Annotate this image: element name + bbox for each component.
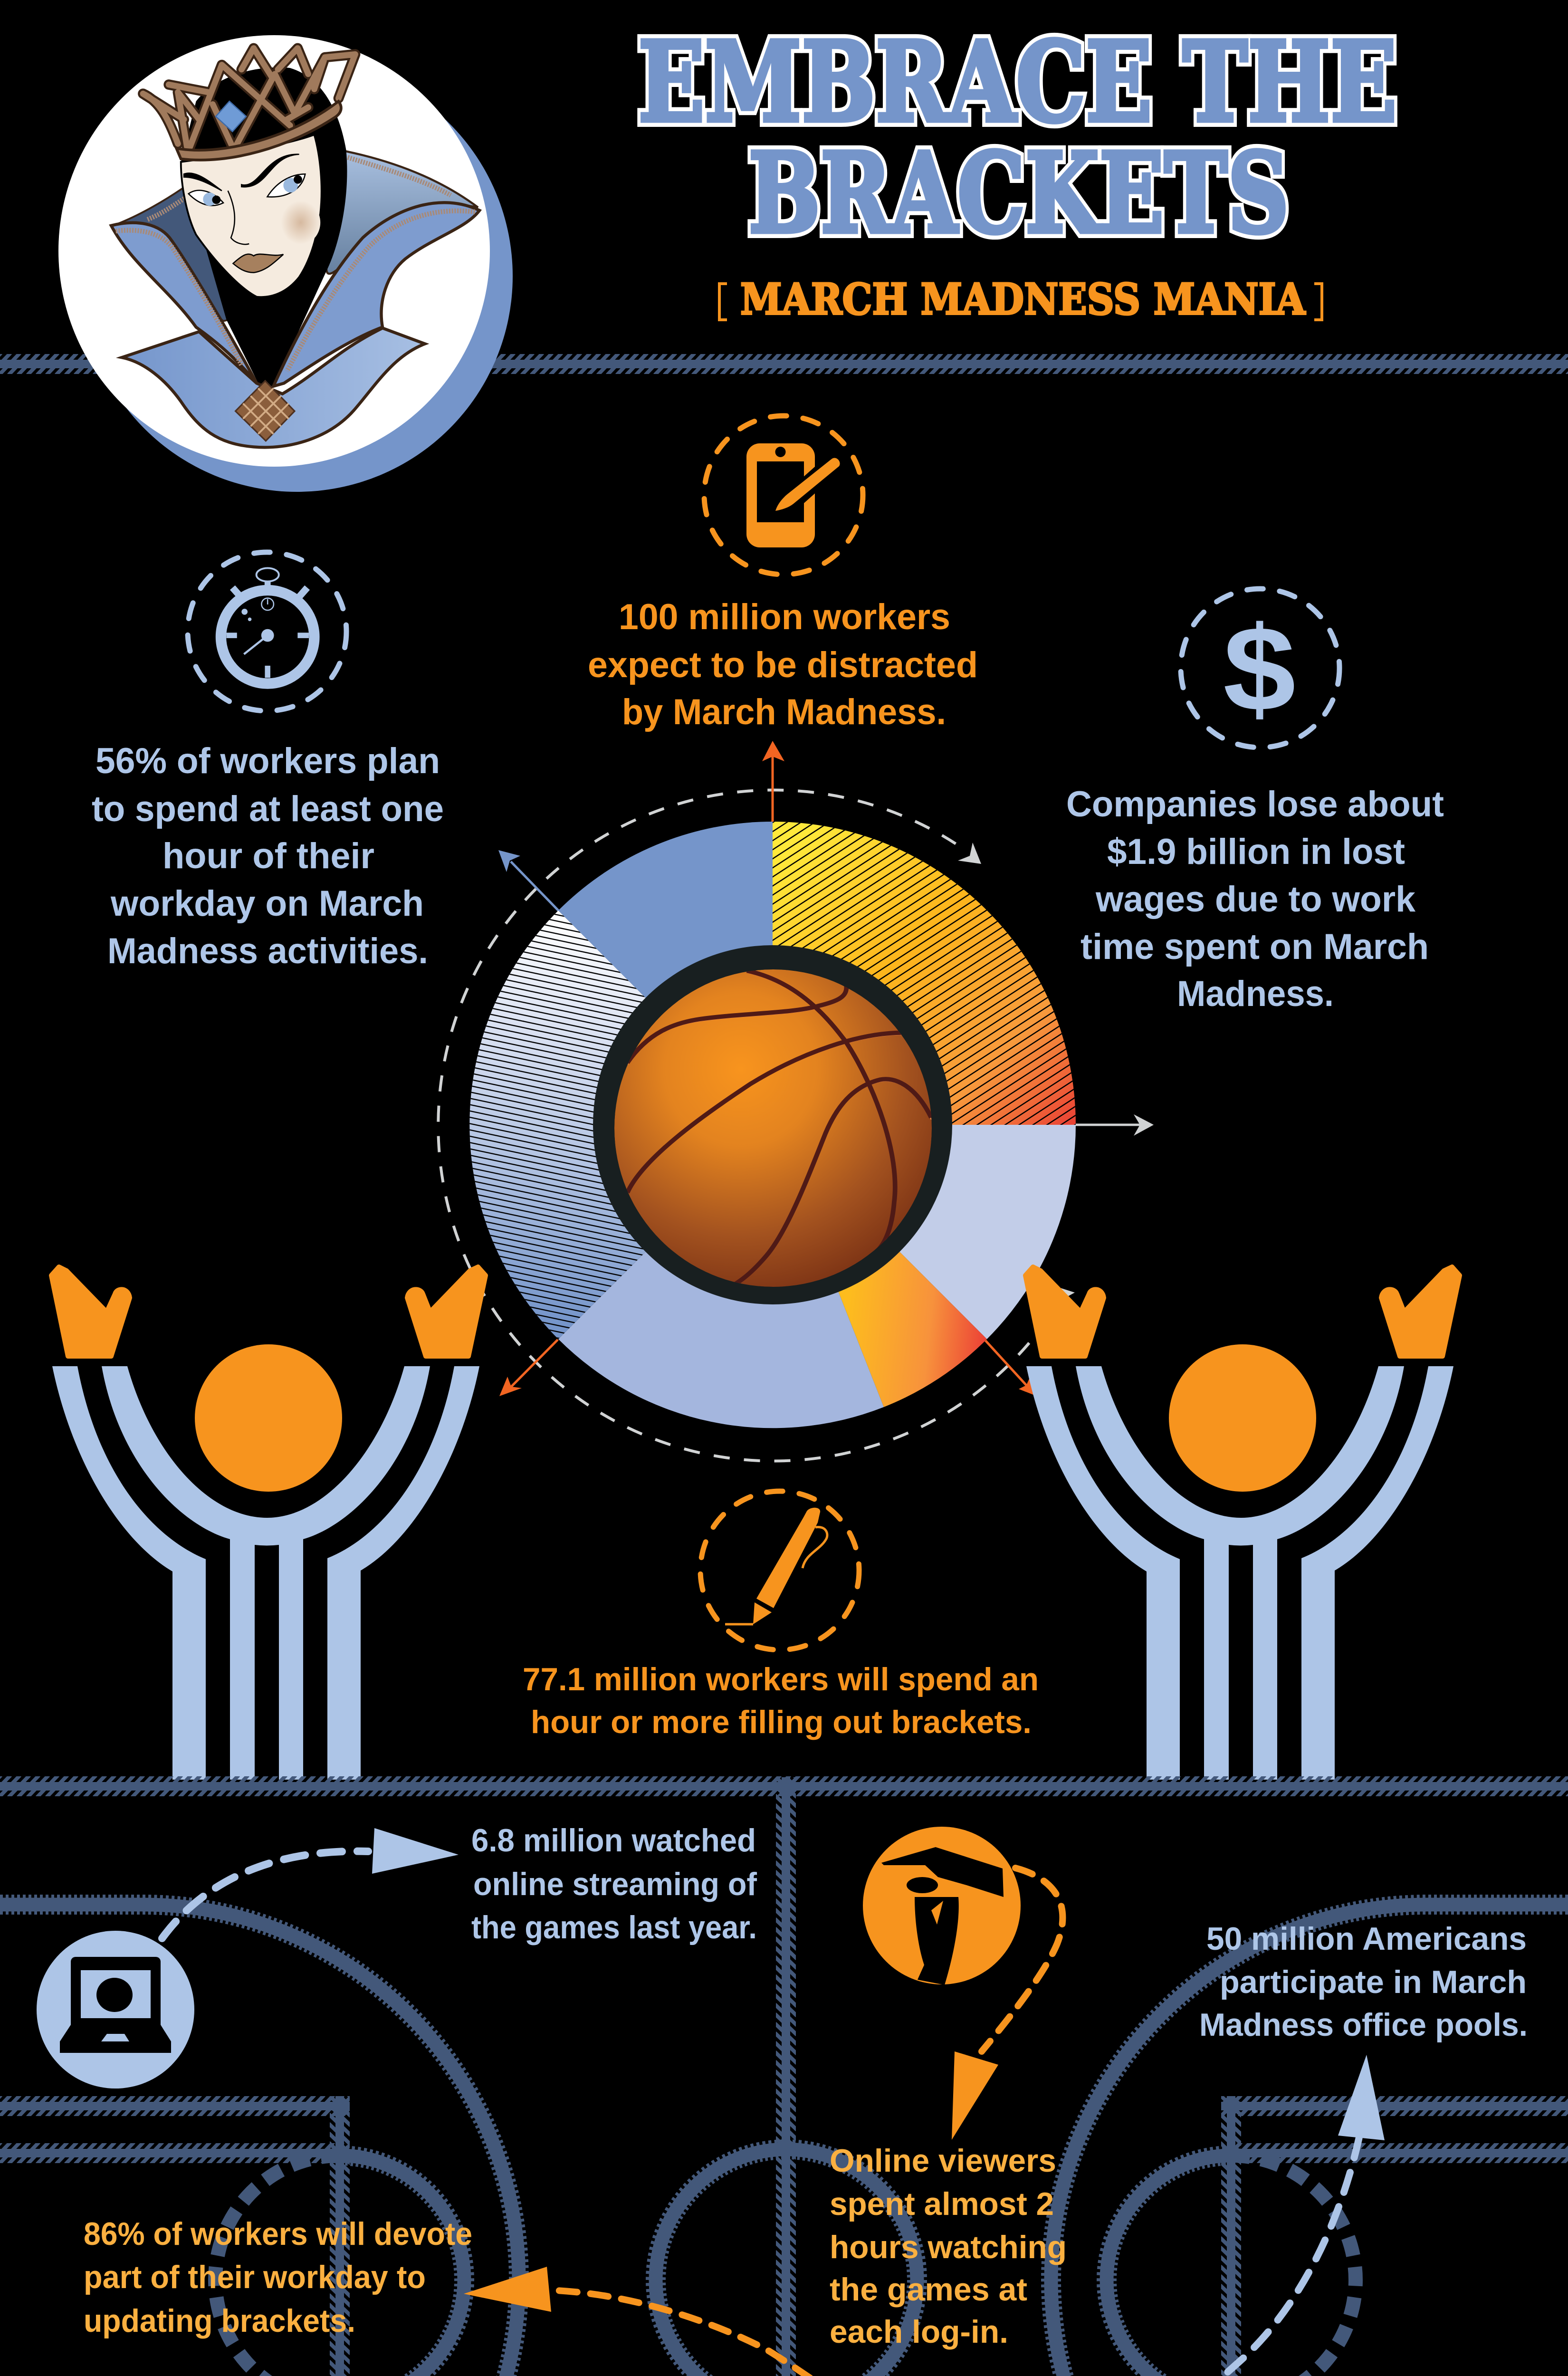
text: 86% of workers: part of their workday to xyxy=(84,2259,426,2295)
icon: stopwatch xyxy=(221,568,314,684)
text: 6.8 million watched: the games last year. xyxy=(471,1909,757,1945)
slice: periwinkle xyxy=(558,1125,884,1428)
text: 50 million Americans xyxy=(1199,1921,1528,2043)
text: 6.8 million watched xyxy=(471,1822,757,1945)
text: 86% of workers xyxy=(84,2216,472,2339)
text: companies lose: time spent on March xyxy=(1080,927,1429,967)
slice: pale blue xyxy=(773,1125,1076,1339)
text: 56% of workers: workday on March xyxy=(110,883,424,924)
text: online viewers: hours watching xyxy=(830,2229,1067,2265)
stat: lost wages xyxy=(1066,589,1444,1014)
text: 100 million workers: by March Madness. xyxy=(622,692,946,732)
text: companies lose: wages due to work xyxy=(1095,879,1416,920)
ring xyxy=(593,945,952,1304)
text: 77.1 million workers: 77.1 million workers will spend an xyxy=(523,1661,1039,1697)
text: 56% of workers: hour of their xyxy=(163,836,374,876)
icon: dollar sign: $ xyxy=(1223,601,1296,736)
queen emblem xyxy=(58,35,513,492)
text: online viewers: Online viewers xyxy=(830,2143,1056,2179)
text: companies lose: $1.9 billion in lost xyxy=(1107,832,1405,872)
text: 6.8 million watched: 6.8 million watched xyxy=(471,1822,756,1859)
cheering figure left xyxy=(51,1267,486,1780)
text: companies lose xyxy=(1066,784,1444,1014)
slice: blue xyxy=(558,822,773,1125)
hand stat xyxy=(830,1827,1067,2350)
text: 56% of workers: 56% of workers plan xyxy=(96,741,440,781)
text: 86% of workers: updating brackets. xyxy=(84,2303,355,2339)
pie chart with basketball xyxy=(438,741,1154,1461)
slice: hatched silver xyxy=(469,910,773,1339)
dashed orbit arrow xyxy=(438,790,1075,1461)
cheering figure right xyxy=(1025,1267,1460,1780)
stat: stopwatch xyxy=(92,552,444,971)
text: 50 million Americans: participate in March xyxy=(1220,1964,1527,2000)
top hatched divider xyxy=(0,354,1568,374)
icon: laptop xyxy=(37,1931,194,2089)
arrow: bracket icon to updating text xyxy=(464,2267,1364,2376)
title: EMBRACE THE xyxy=(638,17,1397,147)
title second line: BRACKETS xyxy=(748,128,1289,258)
arrow: swimmer to office pools text xyxy=(422,2055,1385,2376)
bracket stat xyxy=(84,2216,1510,2376)
text: 86% of workers: 86% of workers will devote xyxy=(84,2216,472,2252)
title xyxy=(638,17,1397,258)
slice: orange gradient xyxy=(773,1125,987,1407)
arrows xyxy=(498,741,1154,1396)
text: 100 million workers: 100 million workers xyxy=(619,597,950,637)
text: 56% of workers xyxy=(92,741,444,971)
stat: distracted workers xyxy=(588,416,978,732)
title second line: BRACKETS xyxy=(748,128,1289,258)
basketball xyxy=(614,969,932,1287)
text: 56% of workers: to spend at least one xyxy=(92,789,444,829)
swimmer stat xyxy=(264,2055,1385,2376)
text: 50 million Americans: 50 million Americans xyxy=(1206,1921,1527,1957)
arrow: laptop to streaming text xyxy=(162,1828,459,1938)
title: EMBRACE THE xyxy=(638,17,1397,147)
stat: brackets pen xyxy=(523,1491,1039,1740)
text: companies lose: Madness. xyxy=(1177,974,1334,1014)
text: 50 million Americans: Madness office pools. xyxy=(1199,2007,1528,2043)
subtitle: MARCH MADNESS MANIA xyxy=(740,274,1306,325)
text: 56% of workers: Madness activities. xyxy=(107,931,428,971)
text: 77.1 million workers xyxy=(523,1661,1039,1740)
text: 100 million workers xyxy=(588,597,978,732)
text: online viewers: each log-in. xyxy=(830,2314,1008,2350)
arrow: hand to viewers text xyxy=(952,1868,1062,2140)
text: 77.1 million workers: hour or more filling out brackets. xyxy=(531,1704,1032,1740)
laptop stat xyxy=(37,1822,757,2089)
text: online viewers: spent almost 2 xyxy=(830,2186,1054,2222)
text: online viewers: the games at xyxy=(830,2271,1027,2308)
text: online viewers xyxy=(830,2143,1067,2350)
slice: hatched gold xyxy=(773,822,1076,1125)
basketball court lines xyxy=(0,1776,1568,2376)
text: companies lose: Companies lose about xyxy=(1066,784,1444,824)
icon: pen xyxy=(725,1508,827,1624)
icon: hands xyxy=(863,1827,1021,1985)
queen illustration xyxy=(111,48,479,447)
icon: phone and stylus xyxy=(746,443,840,547)
text: 100 million workers: expect to be distracted xyxy=(588,645,978,685)
text: 6.8 million watched: online streaming of xyxy=(473,1866,757,1902)
